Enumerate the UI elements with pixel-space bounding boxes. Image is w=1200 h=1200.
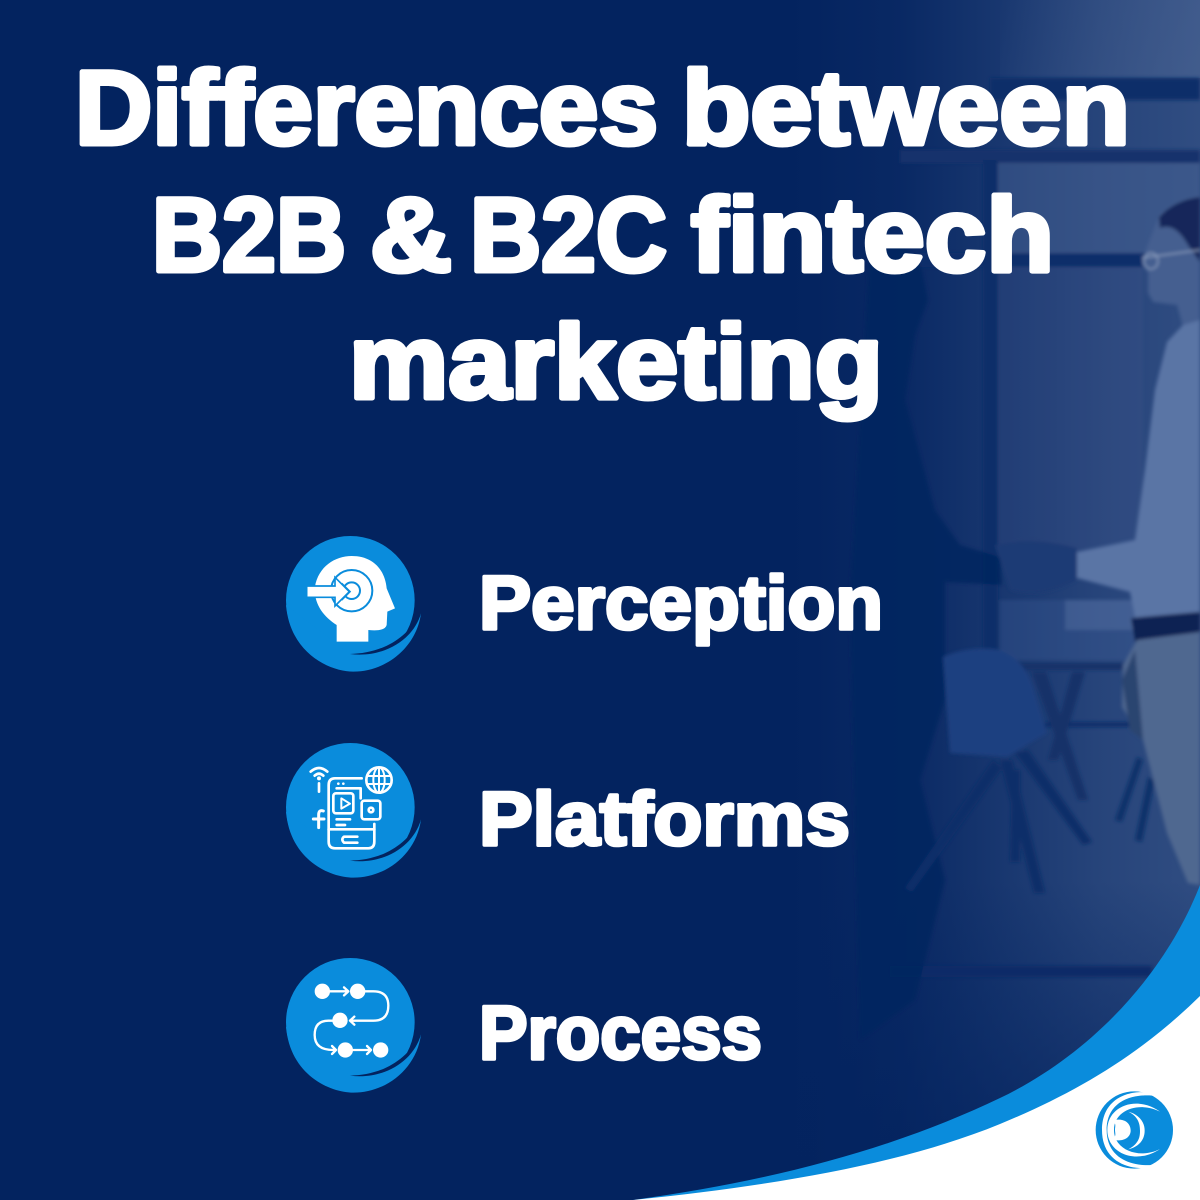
title: marketing — [349, 304, 883, 421]
title — [75, 50, 1130, 421]
title: B2C — [470, 177, 667, 294]
title: fintech — [691, 177, 1054, 294]
icon: winding process flow — [286, 958, 421, 1093]
label: Platforms — [479, 777, 850, 862]
bottom-right blue swoosh — [633, 885, 1200, 1200]
window panes — [998, 163, 1200, 253]
man belt and trousers — [1131, 612, 1200, 642]
title: Differences — [75, 50, 658, 167]
icon: phone with social platforms — [286, 743, 421, 878]
man shirt and arm — [1077, 320, 1200, 618]
label: Perception — [479, 561, 883, 646]
logo — [1096, 1091, 1173, 1169]
title: between — [682, 50, 1130, 167]
label: Process — [479, 991, 762, 1076]
stool legs — [1115, 757, 1155, 842]
background photo: handshake in an office — [790, 0, 1200, 1200]
list item: Platforms — [286, 743, 850, 878]
title: B2B — [152, 177, 346, 294]
list item: Perception — [286, 536, 883, 672]
handshake hands — [995, 541, 1077, 593]
man head — [1142, 197, 1200, 330]
list item: Process — [286, 958, 762, 1093]
white corner — [633, 996, 1200, 1200]
woman silhouette — [850, 242, 1002, 1040]
title: & — [370, 177, 452, 294]
table — [1000, 600, 1135, 660]
chair — [943, 649, 1047, 757]
window frame — [990, 78, 1200, 100]
icon: head with target and arrow — [286, 536, 421, 672]
